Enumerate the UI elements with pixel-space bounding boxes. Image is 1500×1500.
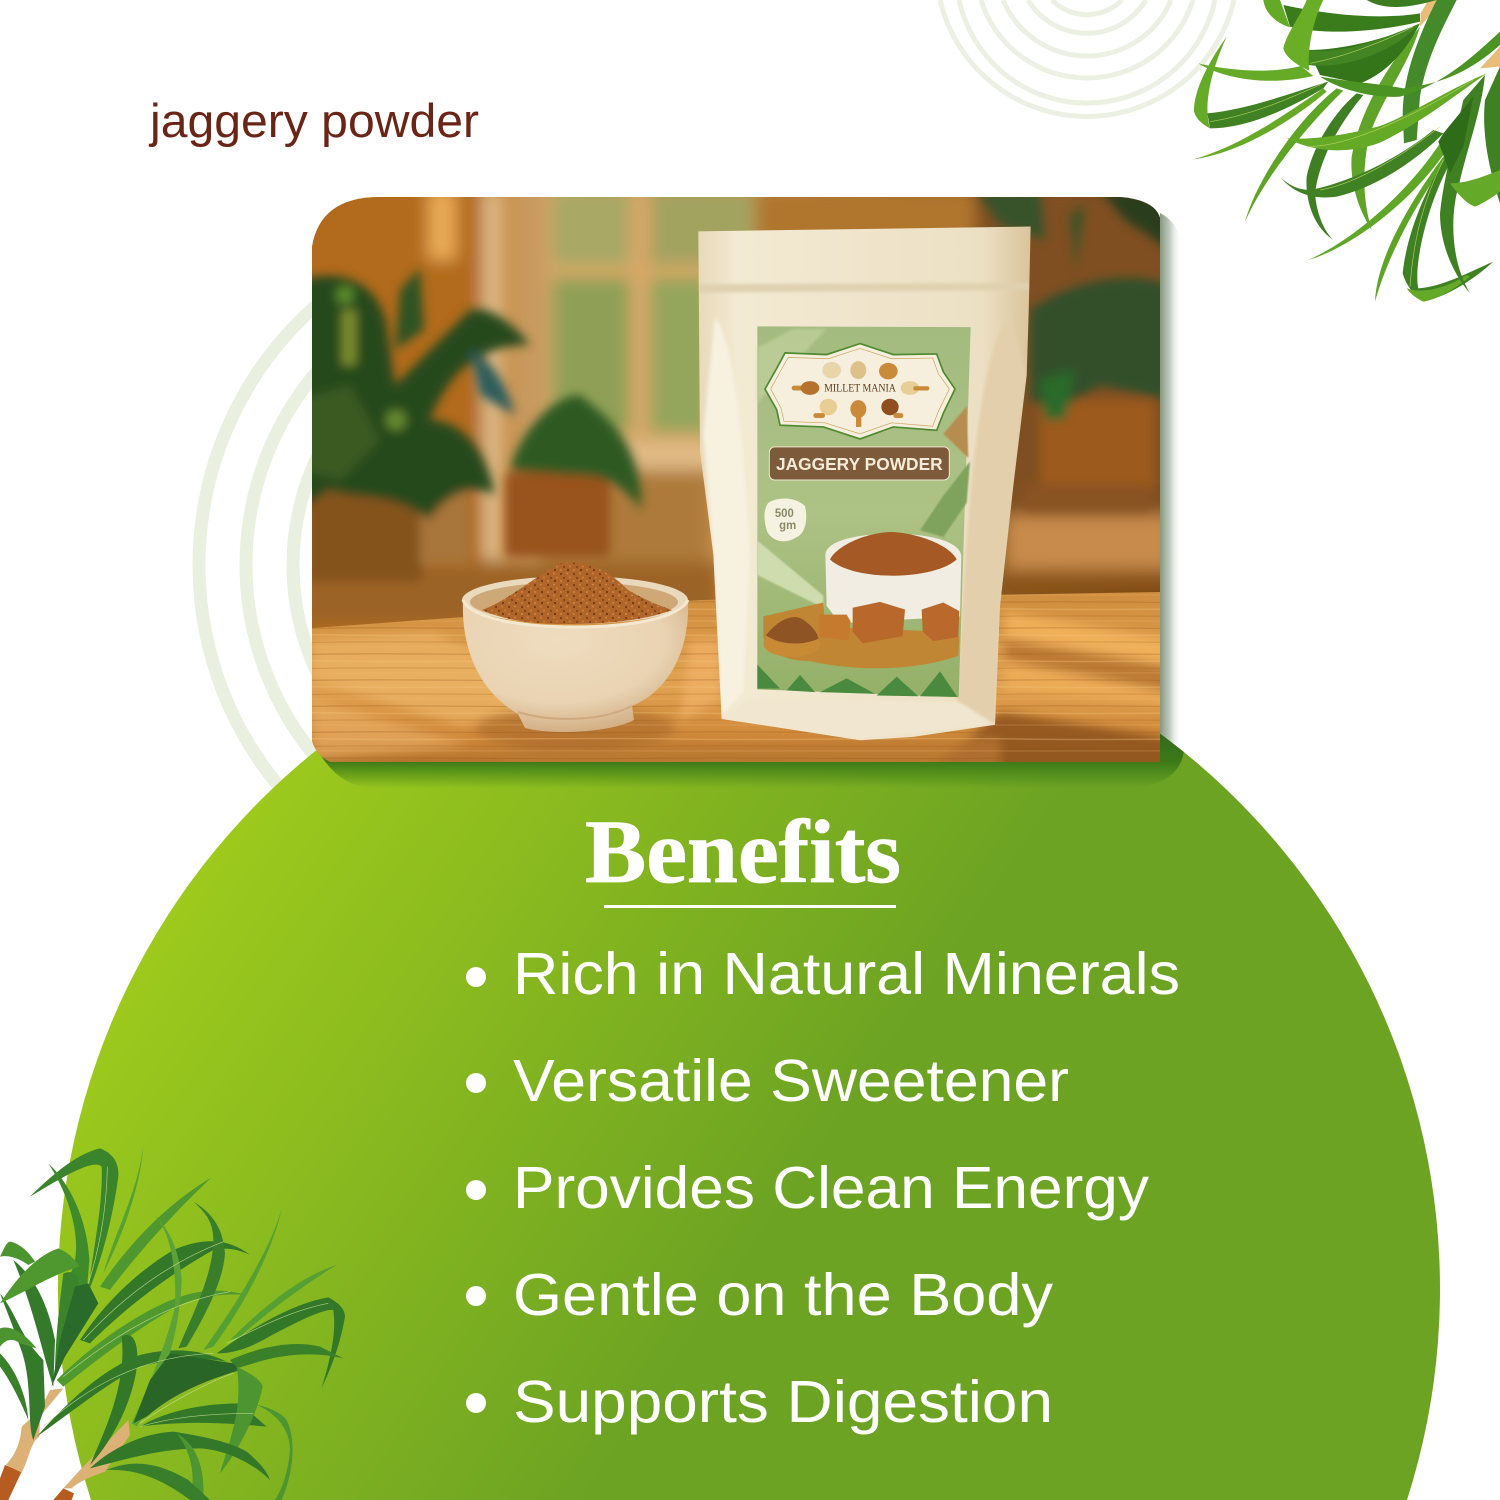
benefit 3: Provides Clean Energy bbox=[513, 1155, 1150, 1221]
decorative concentric rings: top right bbox=[940, 0, 1234, 116]
benefit 1: Rich in Natural Minerals bbox=[513, 941, 1180, 1007]
product photo bbox=[300, 185, 1175, 770]
label name plate: JAGGERY POWDER bbox=[776, 454, 943, 474]
label palm band bbox=[757, 665, 957, 697]
label weight badge: 500 bbox=[775, 508, 794, 520]
title: jaggery powder bbox=[148, 94, 479, 147]
benefit 5: Supports Digestion bbox=[513, 1369, 1053, 1435]
sugarcane leaves: bottom left bbox=[0, 1143, 345, 1500]
label weight badge bbox=[764, 498, 806, 541]
pouch label bbox=[757, 326, 971, 697]
decorative concentric rings: left of photo bbox=[199, 219, 891, 911]
photo: ceramic bowl with jaggery powder bbox=[462, 563, 688, 732]
photo: wooden table bbox=[312, 592, 1160, 762]
green circle panel bbox=[58, 598, 1440, 1500]
heading: Benefits: Benefits bbox=[585, 803, 901, 902]
logo wordmark: MILLET MANIA bbox=[824, 382, 896, 395]
photo: left plant and pot bbox=[300, 268, 530, 582]
photo card shadow bbox=[315, 213, 1184, 788]
powder heap bbox=[482, 563, 672, 624]
photo: product pouch bbox=[698, 227, 1031, 740]
plant one bbox=[0, 1143, 250, 1500]
label weight badge: gm bbox=[779, 520, 796, 532]
photo: blurred room background bbox=[300, 185, 1175, 770]
photo: right plant and pot bbox=[975, 190, 1170, 510]
photo: small plant and pot on sill bbox=[505, 395, 642, 557]
sugarcane leaves: top right bbox=[1193, 0, 1500, 302]
plant two bbox=[53, 1202, 345, 1500]
pouch body bbox=[698, 227, 1031, 740]
label logo plaque bbox=[765, 344, 955, 439]
benefit 2: Versatile Sweetener bbox=[513, 1048, 1069, 1114]
label bowl and jaggery cubes bbox=[763, 532, 961, 668]
benefits list bbox=[466, 941, 1180, 1435]
benefit 4: Gentle on the Body bbox=[513, 1262, 1054, 1328]
label name plate bbox=[769, 447, 949, 480]
